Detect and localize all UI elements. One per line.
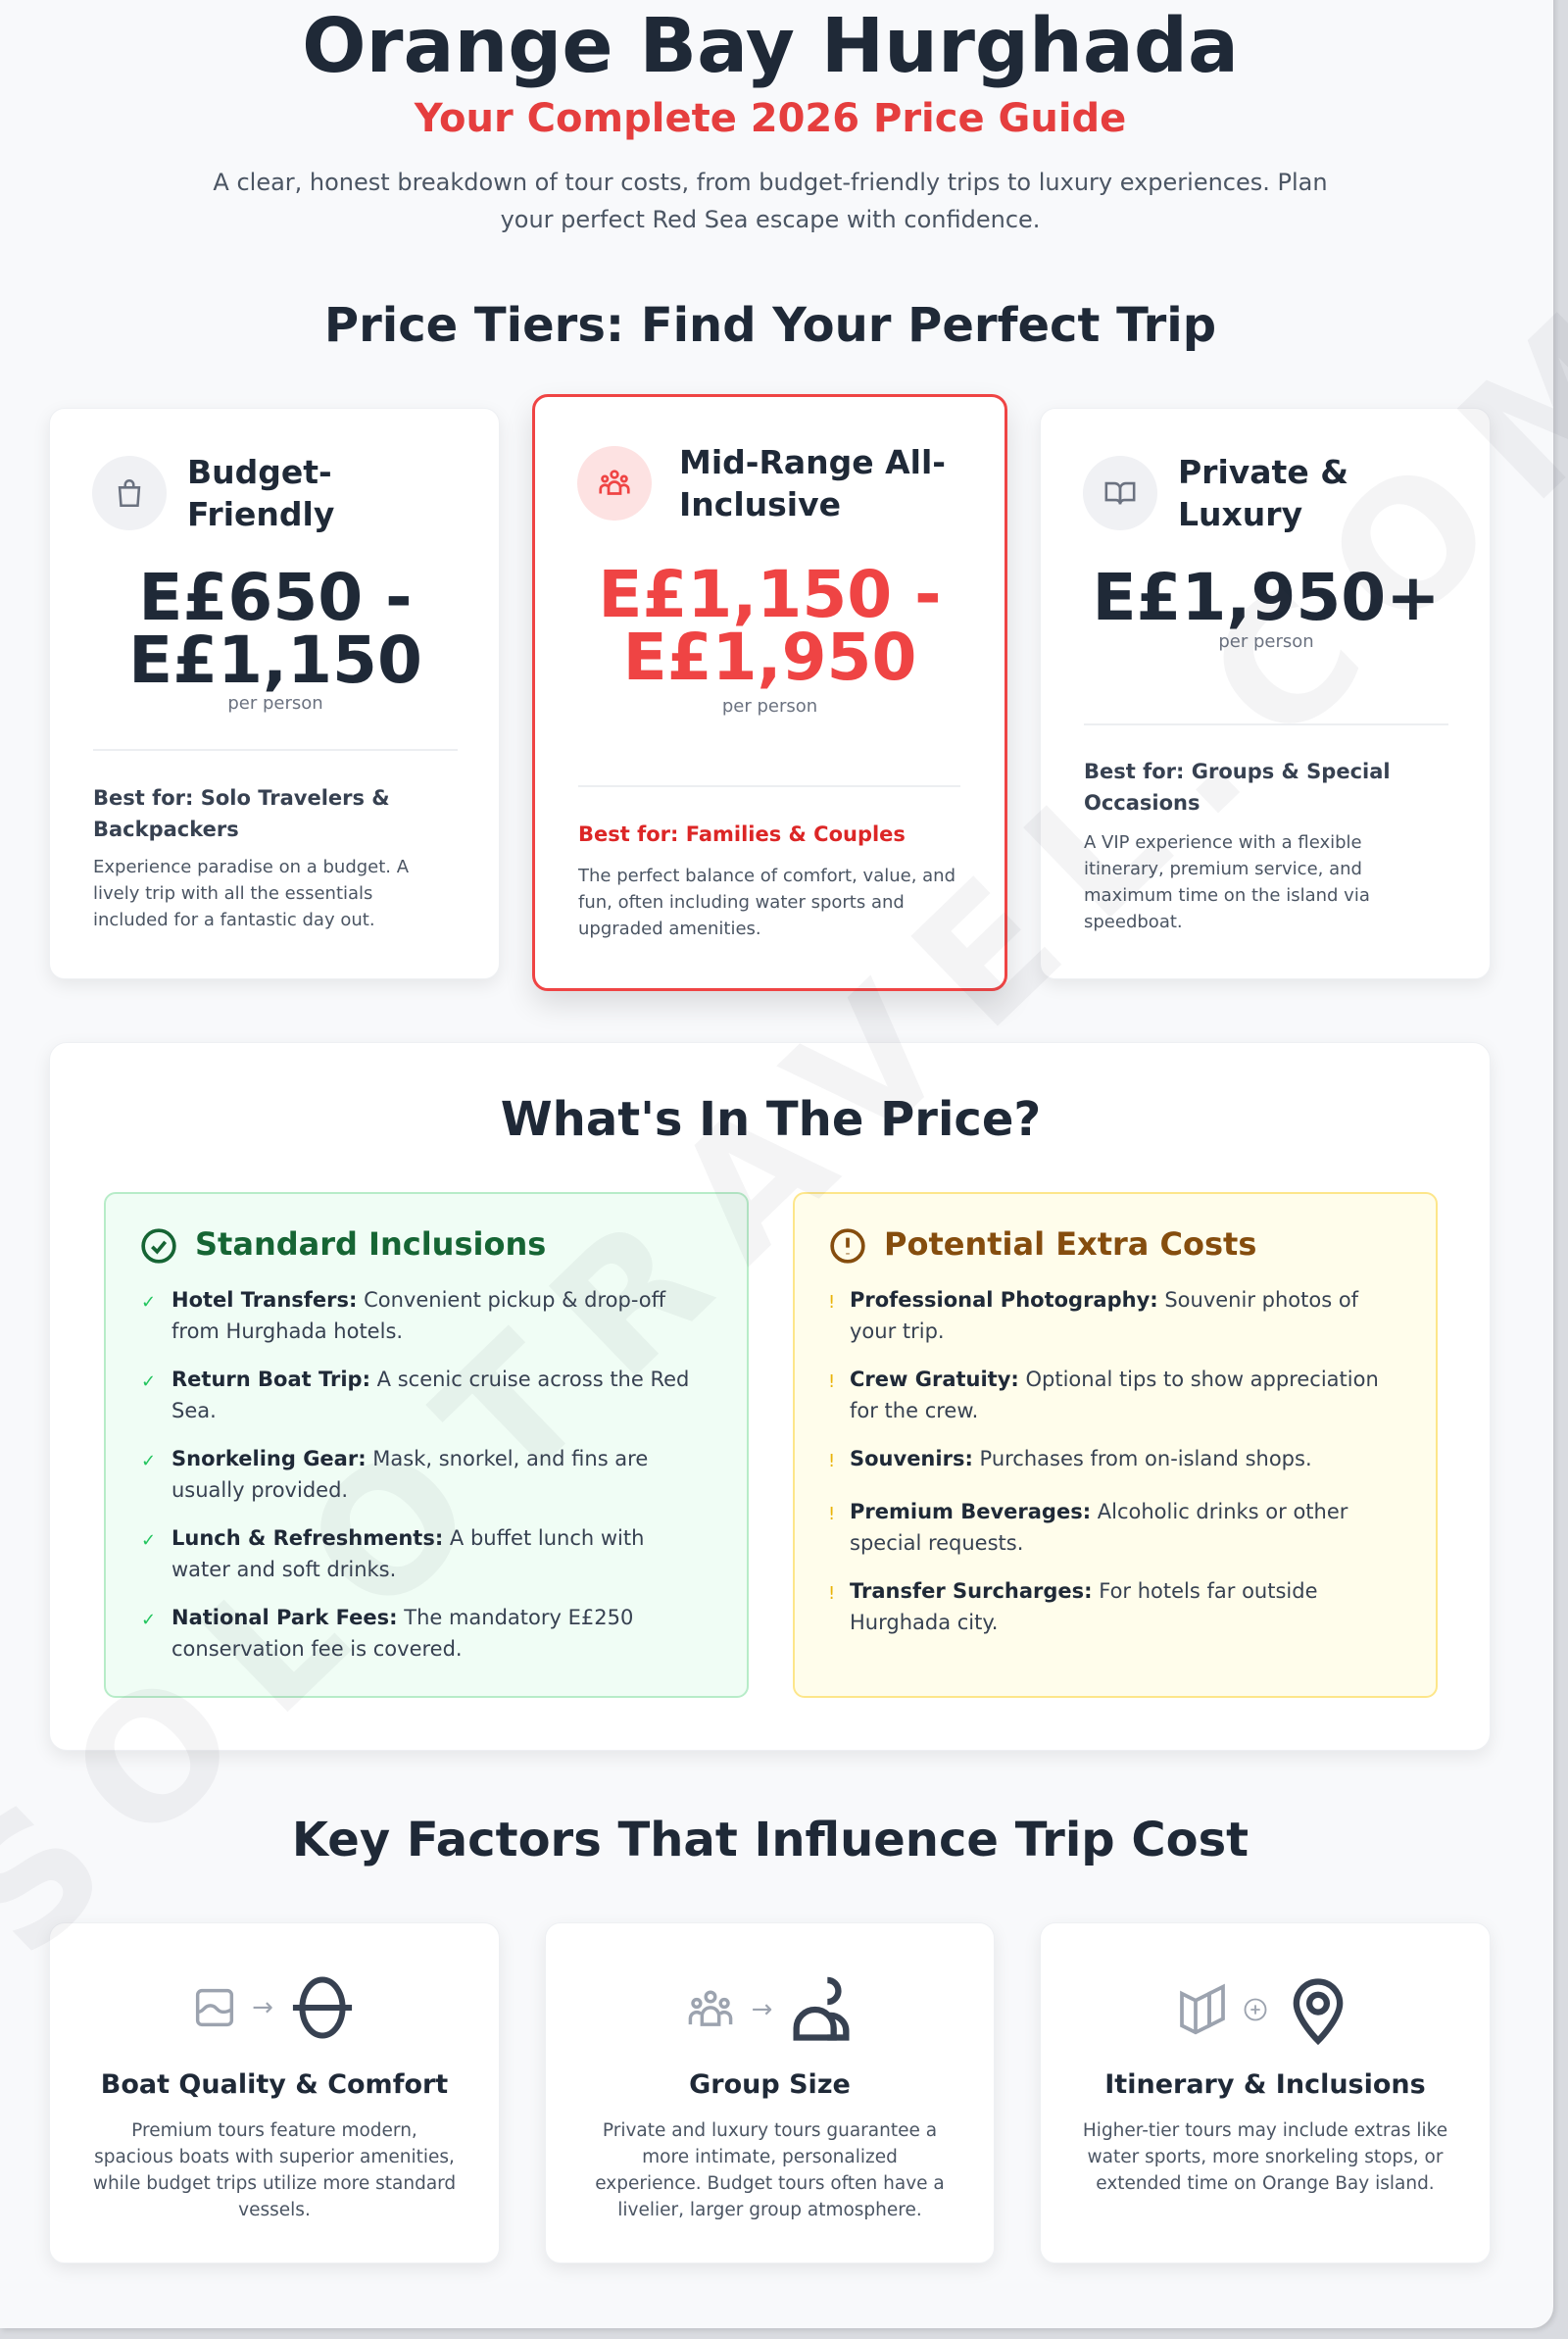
- heading: price tiers: Price Tiers: Find Your Perfect Trip: [324, 298, 1216, 353]
- panel: group size: [545, 1922, 995, 2264]
- panel: boat quality: Premium tours feature modern, spacious boats with superior amenities, while budget trips utilize more standard vessels.: [93, 2120, 456, 2220]
- panel: itinerary: Itinerary & Inclusions: [1104, 2069, 1426, 2100]
- tier title: Friendly: [187, 495, 334, 533]
- panel: itinerary: [1040, 1922, 1491, 2264]
- list: inclusions: Lunch & Refreshments: A buffet lunch with water and soft drinks.: [172, 1526, 644, 1581]
- list: extras: Professional Photography: Souvenir photos of your trip.: [850, 1288, 1358, 1343]
- icon: boat upgrade: →: [252, 1993, 273, 2022]
- panel: mid-range card: [532, 394, 1007, 991]
- panel: budget card: [49, 408, 500, 979]
- price: E£1,150 -: [598, 557, 942, 632]
- icon: group to person: →: [752, 1995, 772, 2024]
- list: inclusions: ✓: [141, 1530, 156, 1551]
- title: Orange Bay Hurghada: [302, 3, 1239, 90]
- panel: group size: Private and luxury tours guarantee a more intimate, personalized experience. Budget tours often have a livelier, larger group atmosphere.: [595, 2120, 945, 2220]
- description: A VIP experience with a flexible itinerary, premium service, and maximum time on the island via speedboat.: [1084, 832, 1370, 932]
- list: extras: [828, 1288, 1379, 1634]
- icon: group: [577, 446, 652, 521]
- price: [598, 557, 942, 695]
- panel: luxury card: [1040, 408, 1491, 979]
- list: inclusions: ✓: [141, 1451, 156, 1471]
- price: [128, 560, 422, 698]
- best for: Best for: Solo Travelers & Backpackers: [93, 786, 390, 841]
- list: extras: !: [828, 1371, 835, 1392]
- heading: extras: Potential Extra Costs: [884, 1225, 1256, 1263]
- icon: group to person: [688, 1976, 849, 2041]
- list: inclusions: National Park Fees: The mandatory E£250 conservation fee is covered.: [172, 1606, 633, 1661]
- icon: shopping bag: [92, 456, 167, 530]
- price: E£1,950+: [1092, 560, 1441, 635]
- panel: mid-range card: per person: [722, 696, 817, 717]
- icon: check circle: [141, 1228, 176, 1264]
- subtitle: Your Complete 2026 Price Guide: [415, 96, 1126, 141]
- panel: itinerary: Higher-tier tours may include extras like water sports, more snorkeling stops, or extended time on Orange Bay island.: [1083, 2120, 1447, 2194]
- price: E£650 -: [138, 560, 413, 635]
- list: extras: Crew Gratuity: Optional tips to show appreciation for the crew.: [850, 1368, 1379, 1422]
- panel: extra costs: [793, 1192, 1438, 1698]
- tier title: Inclusive: [679, 485, 841, 523]
- heading: key factors: Key Factors That Influence Trip Cost: [292, 1813, 1249, 1867]
- tier title: Budget-: [187, 453, 332, 491]
- panel: budget card: per person: [227, 693, 323, 714]
- list: extras: !: [828, 1504, 835, 1524]
- intro text: A clear, honest breakdown of tour costs, from budget-friendly trips to luxury experiences. Plan your perfect Red Sea escape with confidence.: [213, 169, 1328, 233]
- list: extras: !: [828, 1292, 835, 1313]
- panel: boat quality: Boat Quality & Comfort: [101, 2069, 448, 2100]
- list: extras: !: [828, 1451, 835, 1471]
- panel: group size: Group Size: [689, 2069, 851, 2100]
- best for: Best for: Groups & Special Occasions: [1084, 760, 1391, 815]
- heading: inclusions: Standard Inclusions: [195, 1225, 546, 1263]
- tier title: [1178, 453, 1348, 533]
- list: extras: Premium Beverages: Alcoholic drinks or other special requests.: [850, 1500, 1348, 1555]
- heading: What's In The Price?: [501, 1092, 1041, 1147]
- tier title: Mid-Range All-: [679, 443, 946, 481]
- list: inclusions: Hotel Transfers: Convenient pickup & drop-off from Hurghada hotels.: [172, 1288, 665, 1343]
- panel: luxury card: per person: [1218, 631, 1314, 652]
- description: Experience paradise on a budget. A lively trip with all the essentials included for a fantastic day out.: [93, 857, 409, 930]
- price: E£1,150: [128, 622, 422, 698]
- tier title: Luxury: [1178, 495, 1302, 533]
- list: inclusions: [141, 1288, 689, 1661]
- list: inclusions: ✓: [141, 1292, 156, 1313]
- best for: Best for: Families & Couples: [578, 822, 906, 846]
- list: inclusions: ✓: [141, 1610, 156, 1630]
- list: extras: !: [828, 1583, 835, 1604]
- panel: standard inclusions: [104, 1192, 749, 1698]
- list: extras: Souvenirs: Purchases from on-island shops.: [850, 1447, 1312, 1470]
- price: E£1,950: [623, 620, 916, 695]
- tier title: [679, 443, 946, 523]
- tier title: Private &: [1178, 453, 1348, 491]
- list: extras: Transfer Surcharges: For hotels far outside Hurghada city.: [850, 1579, 1317, 1634]
- list: inclusions: Return Boat Trip: A scenic cruise across the Red Sea.: [172, 1368, 689, 1422]
- tier title: [187, 453, 334, 533]
- panel: boat quality: [49, 1922, 500, 2264]
- icon: book: [1083, 456, 1157, 530]
- list: inclusions: Snorkeling Gear: Mask, snorkel, and fins are usually provided.: [172, 1447, 648, 1502]
- description: The perfect balance of comfort, value, and fun, often including water sports and upgraded amenities.: [578, 866, 956, 939]
- icon: map plus pin: [1180, 1978, 1343, 2045]
- icon: alert circle: [830, 1228, 865, 1264]
- list: inclusions: ✓: [141, 1371, 156, 1392]
- icon: boat upgrade: [196, 1976, 353, 2039]
- panel: what's in the price: [49, 1042, 1491, 1751]
